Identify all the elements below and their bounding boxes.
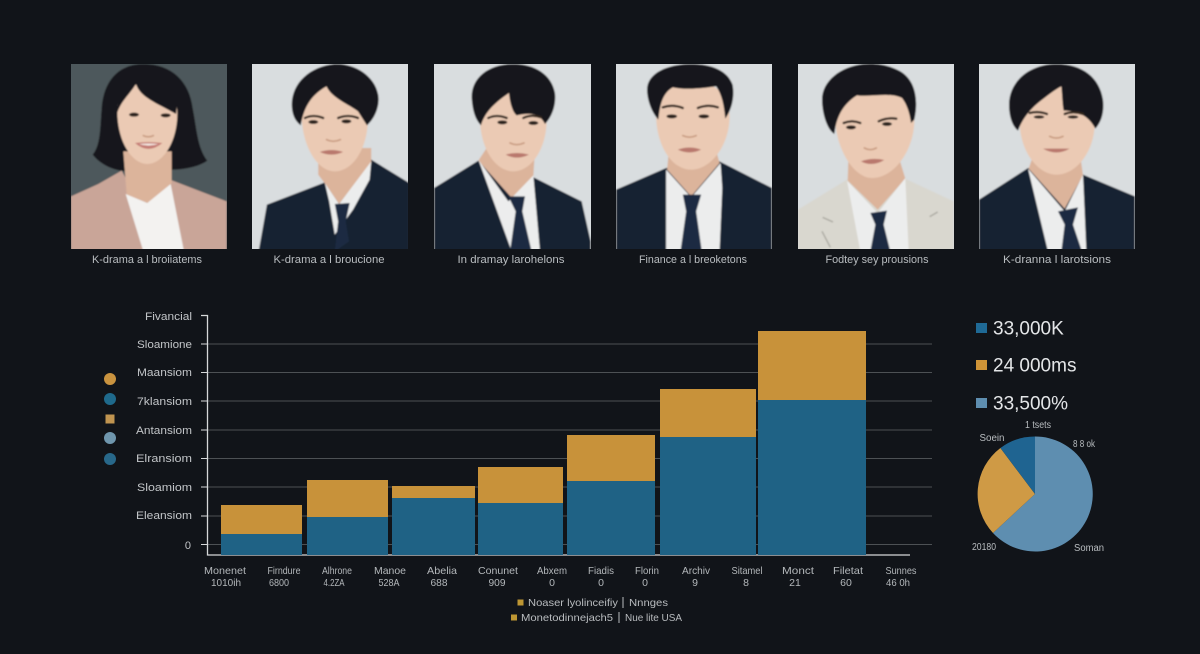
caption 6: K-dranna l larotsions <box>1003 254 1112 266</box>
x axis labels: 9 <box>692 577 698 589</box>
y axis labels: Sloamione <box>137 339 192 351</box>
pie labels: 20180 <box>972 542 996 553</box>
x axis labels: 688 <box>430 577 448 589</box>
pie labels: 8 8 ok <box>1073 439 1096 450</box>
caption 3: In dramay larohelons <box>458 254 565 266</box>
caption 5: Fodtey sey prousions <box>826 254 929 266</box>
pie chart <box>972 420 1104 554</box>
x axis labels <box>204 565 916 589</box>
x axis labels: 6800 <box>269 577 289 589</box>
right stat legend: 33,000K <box>993 318 1064 340</box>
x axis labels: 60 <box>840 577 852 589</box>
x axis labels: Monenet <box>204 565 246 577</box>
bars: blue lower segments <box>221 400 866 555</box>
y axis labels: Fivancial <box>145 311 192 323</box>
pie labels: Soman <box>1074 543 1104 554</box>
bars: orange upper segments <box>221 331 866 534</box>
x axis labels: Filetat <box>833 565 863 577</box>
caption 4: Finance a l breoketons <box>639 254 747 266</box>
x axis labels: Firndure <box>268 565 301 577</box>
x axis labels: 0 <box>549 577 555 589</box>
right stat legend: 24 000ms <box>993 356 1076 376</box>
portrait card 6: man in navy suit, smiling <box>974 60 1140 266</box>
caption 1: K-drama a l broiiatems <box>92 254 202 266</box>
pie labels: Soein <box>980 433 1004 444</box>
x axis labels: Fiadis <box>588 565 614 577</box>
x axis labels: Conunet <box>478 565 518 577</box>
y axis labels: 7klansiom <box>137 396 192 408</box>
portrait card 5: man in cream suit <box>793 60 959 266</box>
portrait card 2: man in navy suit <box>247 60 413 266</box>
bottom legend: Noaser lyolinceifiy <box>528 597 619 609</box>
x axis labels: Florin <box>635 565 659 577</box>
pie labels: 1 tsets <box>1025 420 1051 431</box>
x axis labels: Sitamel <box>732 565 762 577</box>
y axis and baseline <box>201 316 910 555</box>
y axis labels: 0 <box>185 540 191 552</box>
y axis labels: Sloamiom <box>137 482 192 494</box>
y axis labels: Antansiom <box>136 425 192 437</box>
pie labels <box>972 420 1104 554</box>
x axis labels: 0 <box>642 577 648 589</box>
x axis labels: 909 <box>488 577 506 589</box>
y axis labels: Elransiom <box>136 453 192 465</box>
x axis labels: Sunnes <box>886 565 916 577</box>
y axis ticks <box>201 344 207 544</box>
bottom legend: Nue lite USA <box>625 612 682 624</box>
x axis labels: 1010ih <box>211 577 241 589</box>
x axis labels: Archiv <box>682 565 711 577</box>
stacked bar chart <box>136 311 932 589</box>
x axis labels: 4.2ZA <box>324 577 344 589</box>
x axis labels: 8 <box>743 577 749 589</box>
y axis labels: Eleansiom <box>136 510 192 522</box>
right stat legend: 33,500% <box>993 394 1068 414</box>
y axis labels: Maansiom <box>137 367 192 379</box>
x axis labels: 528A <box>378 577 400 589</box>
caption 2: K-drama a l broucione <box>274 254 384 266</box>
x axis labels: Monct <box>782 565 814 577</box>
bottom legend: Nnnges <box>629 597 668 609</box>
y axis labels <box>136 311 192 552</box>
x axis labels: Abxem <box>537 565 567 577</box>
portrait card 3: man in navy suit <box>428 60 595 266</box>
left dot legend <box>104 373 116 465</box>
x axis labels: 0 <box>598 577 604 589</box>
right stat legend <box>976 318 1076 414</box>
x axis labels: Abelia <box>427 565 457 577</box>
x axis labels: 21 <box>789 577 801 589</box>
bottom legend <box>511 597 682 624</box>
portrait card 1: woman in pink blazer <box>67 60 232 266</box>
x axis labels: Alhrone <box>322 565 352 577</box>
x axis labels: Manoe <box>374 565 406 577</box>
bottom legend: Monetodinnejach5 <box>521 612 613 624</box>
x axis labels: 46 0h <box>886 577 910 589</box>
portrait card 4: man in navy suit <box>611 60 776 266</box>
